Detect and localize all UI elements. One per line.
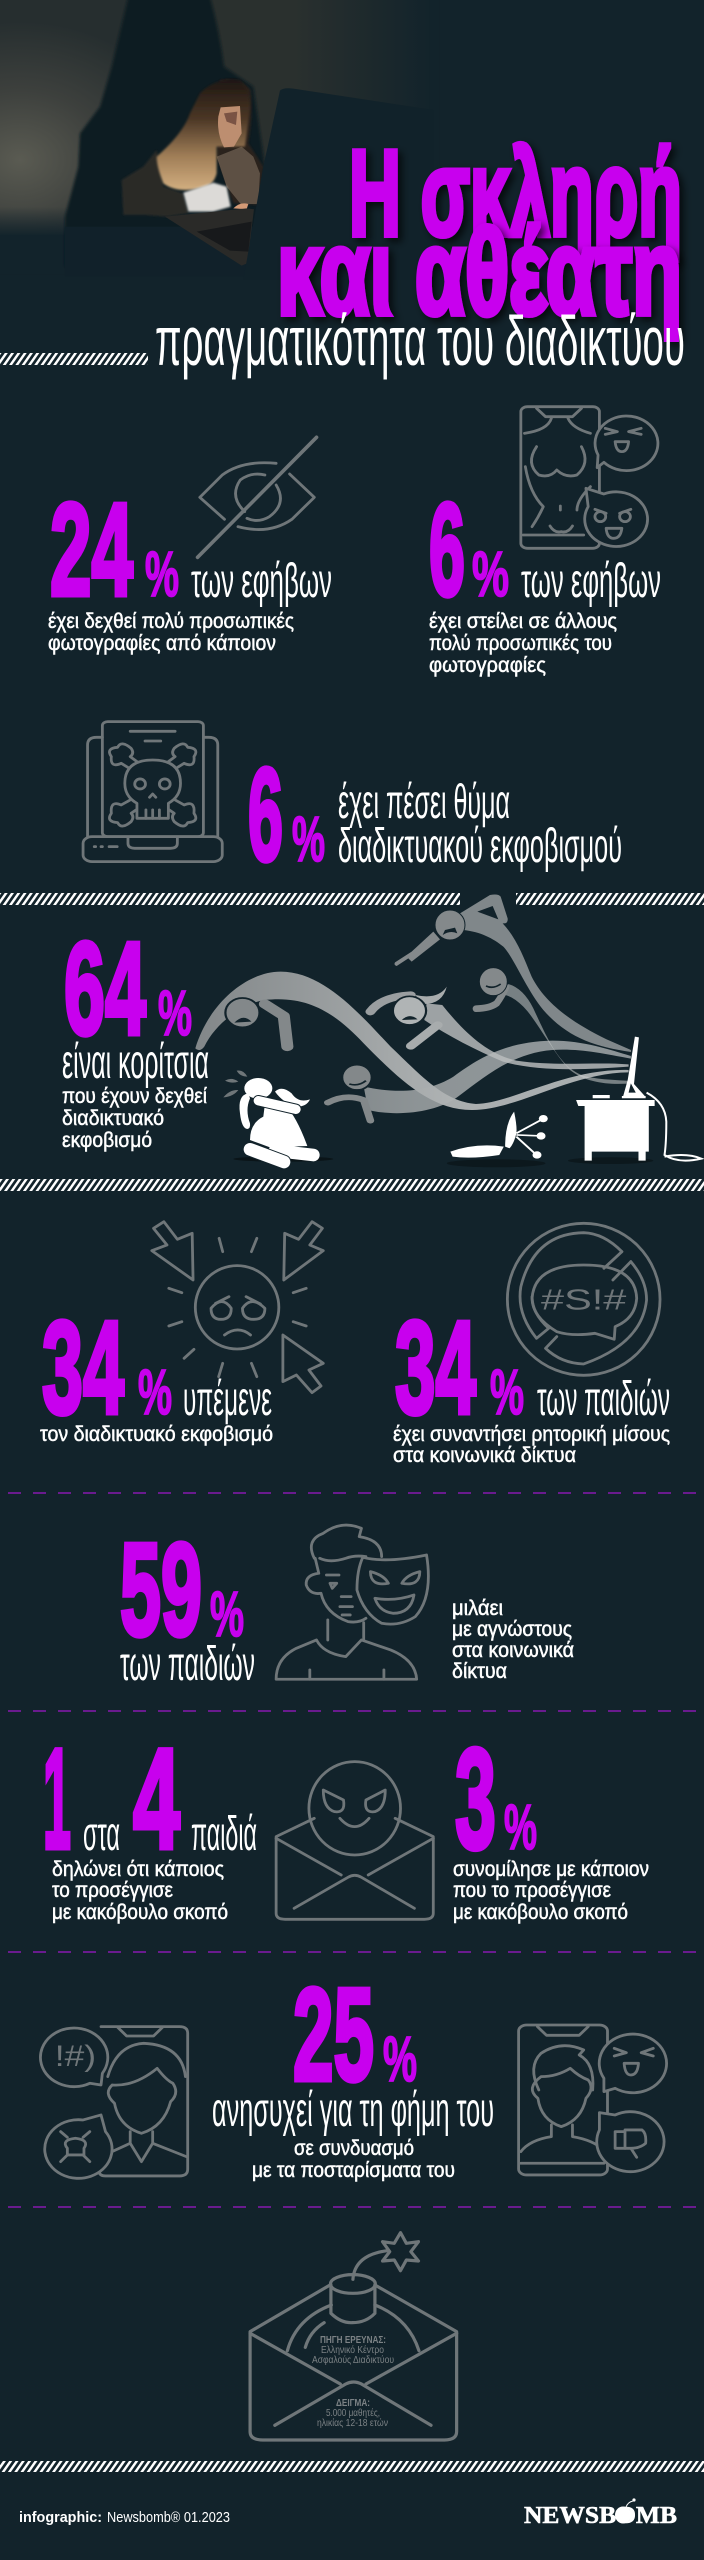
description: εκφοβισμό [62,1129,152,1152]
panel: 1 in 4 children [43,1720,257,1924]
source text: Ασφαλούς Διαδικτύου [312,2354,394,2366]
description [48,610,294,655]
toppled chair [450,1112,548,1159]
panel: 6% cyberbullying victims: 6 [248,741,283,888]
description: τον διαδικτυακό εκφοβισμό [40,1423,273,1446]
label: είναι κορίτσια [62,1036,209,1089]
description: φωτογραφίες [429,654,546,677]
crying victim [223,1070,333,1162]
description [252,2137,455,2182]
description: έχει συναντήσει ρητορική μίσους [393,1423,670,1446]
number 34: 34 [395,1294,476,1441]
logo: Newsbomb: NEWSBOMB [524,2503,677,2529]
description: που το προσέγγισε [453,1879,611,1902]
ghost figure: hair middle [370,987,629,1069]
panel: 24% of teens [48,437,332,655]
ghost figure: top pointing [394,894,631,1052]
description [62,1085,207,1152]
hero photo: girl at laptop [0,0,440,280]
sample text [317,2397,388,2429]
icon: sad face with cursors [152,1222,323,1393]
icon: phone with woman, symbols and skull: !#) [55,2041,96,2073]
number 64: 64 [64,915,146,1062]
description: πολύ προσωπικές του [429,632,612,655]
panel: 1 in 4 children: 1 [43,1720,71,1879]
percent sign: % [138,1356,172,1428]
icon: phone with body and emoji bubbles [521,407,658,548]
number 24: 24 [50,476,133,623]
description [452,1597,574,1683]
icon: envelope bomb with source notes [250,2233,457,2440]
icon: envelope with evil face [276,1762,433,1919]
description [52,1858,228,1924]
illustration: online bullies attacking a victim [195,894,701,1167]
footer credit: Newsbomb® 01.2023 [107,2510,230,2526]
percent sign: % [490,1356,524,1428]
description: έχει στείλει σε άλλους [429,610,617,633]
panel: 1 in 4 children: στα [83,1808,120,1861]
percent sign: % [145,538,179,610]
panel: 64% girls [62,894,701,1167]
percent sign: % [472,538,509,610]
label: των εφήβων [191,555,332,608]
description: στα κοινωνικά [452,1639,574,1662]
description: μιλάει [452,1597,503,1620]
description: διαδικτυακό [62,1107,164,1130]
ghost figure: lower [328,1041,631,1121]
label: έχει πέσει θύμα [338,776,510,829]
icon: phone with man, emoji and thumbs down [519,2025,667,2175]
description: σε συνδυασμό [294,2137,414,2160]
description: με τα ποσταρίσματα του [252,2159,455,2182]
description: με κακόβουλο σκοπό [52,1901,228,1924]
number 25: 25 [293,1961,374,2108]
label [338,776,622,873]
sample text: 5.000 μαθητές, [326,2407,380,2419]
description: με αγνώστους [452,1618,572,1641]
label: των παιδιών [120,1638,255,1691]
sample text: ηλικίας 12-18 ετών [317,2417,388,2429]
description: με κακόβουλο σκοπό [453,1901,628,1924]
description [393,1423,670,1467]
source text: ΠΗΓΗ ΕΡΕΥΝΑΣ: [320,2334,386,2346]
number 59: 59 [120,1516,202,1663]
ghost figure: right [476,968,631,1084]
panel: 6% of teens [429,407,661,677]
description [453,1858,649,1924]
footer credit [19,2510,230,2526]
description [429,610,617,677]
label: υπέμενε [183,1373,272,1426]
number 4: 4 [133,1720,180,1879]
ghost figure: big left [195,972,629,1110]
icon: person holding mask [276,1525,428,1679]
description: στα κοινωνικά δίκτυα [393,1444,576,1467]
description: δίκτυα [452,1660,507,1683]
description: φωτογραφίες από κάποιον [48,632,276,655]
description: δηλώνει ότι κάποιος [52,1858,224,1881]
panel: 6% cyberbullying victims [83,722,622,888]
panel: 34% endured [40,1222,323,1446]
floor shadows [447,1157,653,1167]
description: που έχουν δεχθεί [62,1085,207,1108]
infographic canvas: παιδιά [191,1808,257,1861]
percent sign: % [210,1578,244,1650]
description: συνομίλησε με κάποιον [453,1858,649,1881]
title block [155,125,685,380]
panel: 34% of children hate speech [393,1223,670,1467]
description: έχει δεχθεί πολύ προσωπικές [48,610,294,633]
sample text: ΔΕΙΓΜΑ: [336,2397,370,2409]
description: το προσέγγισε [52,1879,173,1902]
icon: phone with woman, symbols and skull [40,2027,188,2178]
icon: laptop with skull [83,722,222,862]
icon: prohibited hate speech bubble: #S!# [541,1285,627,1316]
number 34: 34 [42,1294,124,1441]
icon: crossed eye [198,437,317,557]
icon: prohibited hate speech bubble [507,1223,660,1375]
desk with monitor [576,1037,701,1161]
panel: 25% [40,1961,667,2182]
number 3: 3 [455,1720,496,1879]
percent sign: % [383,2023,417,2095]
panel: 59% of children [120,1516,574,1691]
source text [312,2334,394,2366]
panel: 6% of teens: 6 [429,476,465,623]
panel: 3% [453,1720,649,1924]
footer credit: infographic: [19,2510,102,2526]
percent sign: % [158,977,192,1049]
source text: Ελληνικό Κέντρο [321,2344,384,2356]
percent sign: % [504,1791,537,1863]
percent sign: % [292,803,325,875]
